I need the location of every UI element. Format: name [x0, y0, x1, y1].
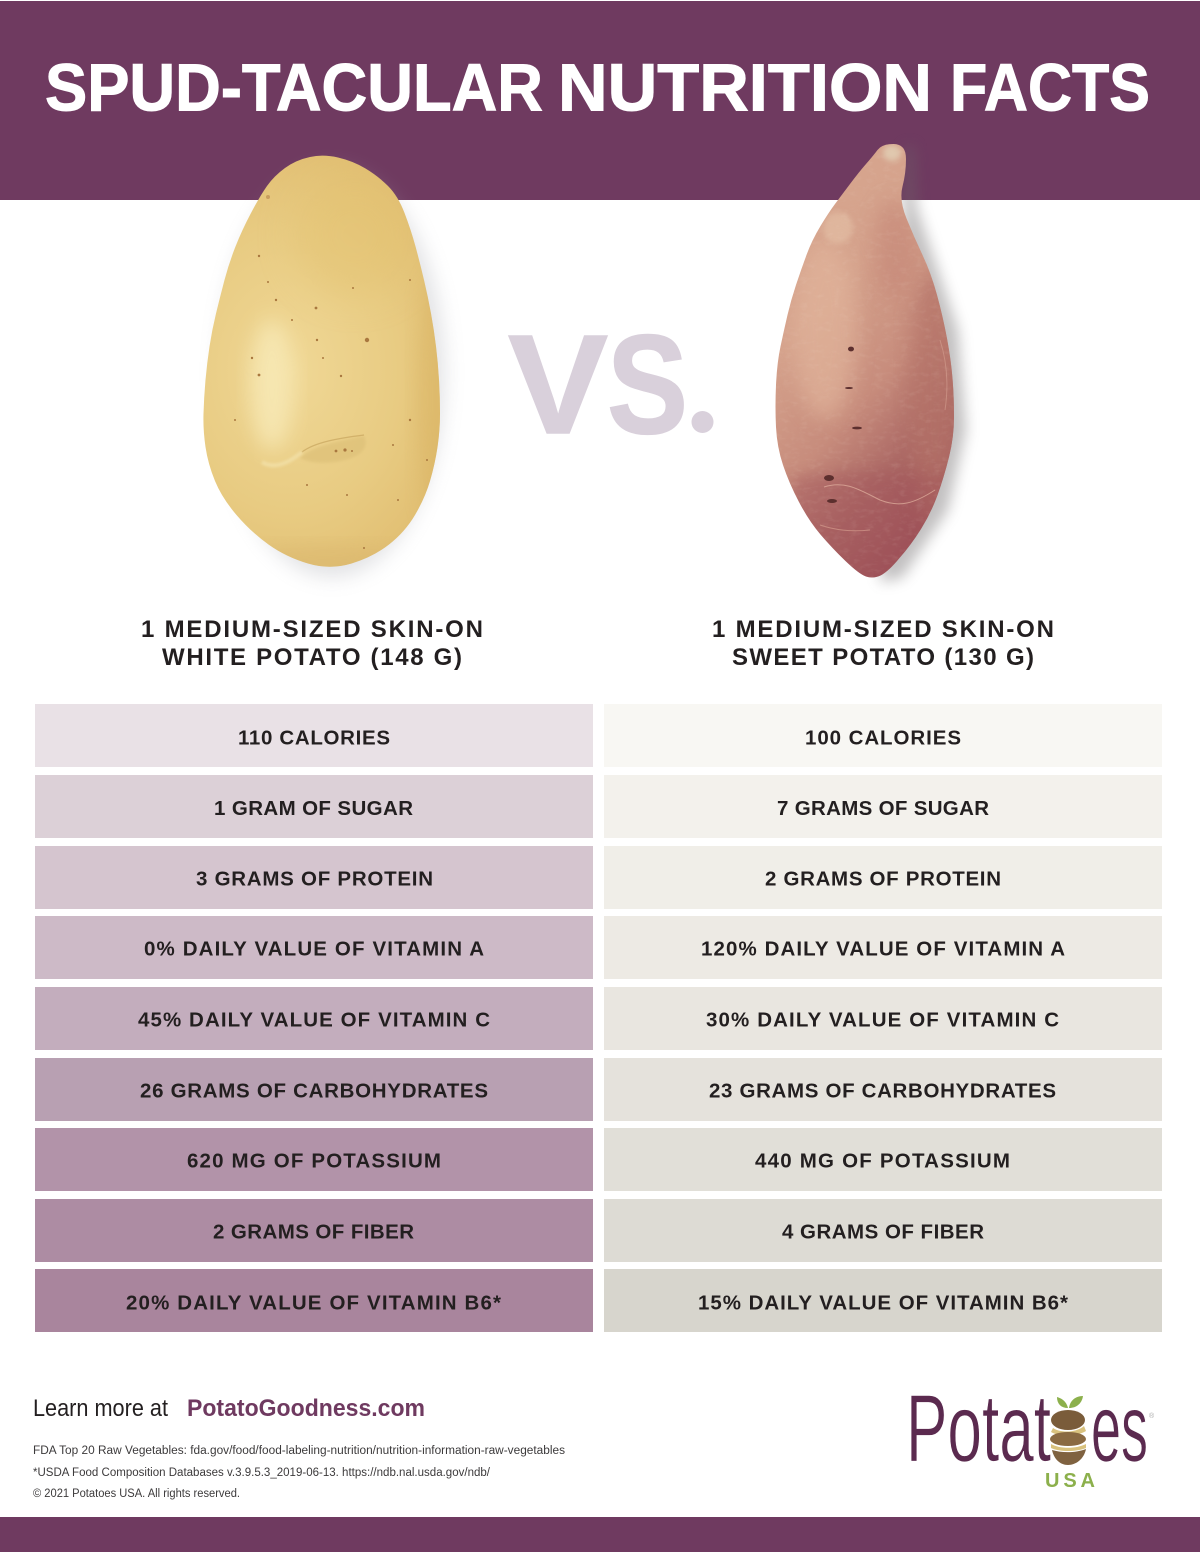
VS label: S	[607, 305, 688, 463]
heading: sweet potato serving	[712, 616, 1054, 671]
row: vitamin C	[35, 987, 593, 1050]
title	[45, 50, 1150, 126]
row: calories	[35, 704, 593, 767]
row: fiber: 2 GRAMS OF FIBER	[213, 1220, 414, 1244]
heading: sweet potato serving: 1 MEDIUM-SIZED SKIN-ON	[712, 616, 1054, 643]
VS label: .	[688, 339, 716, 451]
row: fiber	[604, 1199, 1162, 1262]
row: fiber: 4 GRAMS OF FIBER	[782, 1220, 984, 1244]
row: sugar	[35, 775, 593, 838]
row: protein	[604, 846, 1162, 909]
title: NUTRITION	[558, 50, 932, 126]
call to action: learn more	[33, 1395, 425, 1422]
heading: white potato serving: 1 MEDIUM-SIZED SKIN-ON	[141, 616, 483, 643]
row: vitamin B6: 20% DAILY VALUE OF VITAMIN B6*	[126, 1292, 501, 1314]
row: carbohydrates: 26 GRAMS OF CARBOHYDRATES	[140, 1080, 488, 1102]
footer band	[0, 1517, 1200, 1552]
row: calories	[604, 704, 1162, 767]
footnotes	[33, 1445, 565, 1500]
logo: Potatoes USA: USA	[1045, 1470, 1095, 1492]
VS label	[508, 305, 716, 463]
footnotes: *USDA Food Composition Databases v.3.9.5.3_2019-06-13. https://ndb.nal.usda.gov/ndb/	[33, 1467, 491, 1479]
title: FACTS	[950, 50, 1150, 126]
row: carbohydrates: 23 GRAMS OF CARBOHYDRATES	[709, 1080, 1056, 1102]
panel: sweet potato nutrition column	[604, 704, 1162, 1332]
row: vitamin C	[604, 987, 1162, 1050]
logo: Potatoes USA: ®	[1149, 1412, 1155, 1420]
row: calories: 110 CALORIES	[238, 726, 390, 750]
row: protein: 2 GRAMS OF PROTEIN	[765, 868, 1001, 890]
panel: white potato nutrition column	[35, 704, 593, 1332]
row: calories: 100 CALORIES	[805, 726, 961, 750]
row: vitamin A: 0% DAILY VALUE OF VITAMIN A	[144, 938, 484, 960]
row: potassium	[604, 1128, 1162, 1191]
row: protein: 3 GRAMS OF PROTEIN	[196, 868, 433, 890]
call to action: learn more: PotatoGoodness.com	[187, 1395, 425, 1422]
row: vitamin A: 120% DAILY VALUE OF VITAMIN A	[701, 938, 1065, 960]
row: sugar: 7 GRAMS OF SUGAR	[777, 797, 989, 820]
row: vitamin A	[604, 916, 1162, 979]
heading: white potato serving: WHITE POTATO (148 G)	[162, 644, 462, 671]
footnotes: © 2021 Potatoes USA. All rights reserved.	[33, 1488, 240, 1500]
row: sugar: 1 GRAM OF SUGAR	[214, 797, 413, 820]
row: vitamin B6	[604, 1269, 1162, 1332]
row: protein	[35, 846, 593, 909]
row: vitamin A	[35, 916, 593, 979]
logo: Potatoes USA: Potat	[906, 1375, 1051, 1482]
icon: sliced potato with leaves	[1050, 1396, 1086, 1465]
logo: Potatoes USA: es	[1091, 1375, 1148, 1482]
row: carbohydrates	[604, 1058, 1162, 1121]
icon: sweet potato	[770, 140, 966, 590]
heading: white potato serving	[141, 616, 483, 671]
row: carbohydrates	[35, 1058, 593, 1121]
title: SPUD-TACULAR	[45, 50, 543, 126]
row: sugar	[604, 775, 1162, 838]
row: fiber	[35, 1199, 593, 1262]
header band	[0, 1, 1200, 200]
row: potassium: 440 MG OF POTASSIUM	[755, 1150, 1010, 1172]
icon: white potato	[203, 156, 462, 583]
row: vitamin B6	[35, 1269, 593, 1332]
row: potassium	[35, 1128, 593, 1191]
row: vitamin C: 45% DAILY VALUE OF VITAMIN C	[138, 1008, 490, 1032]
call to action: learn more: Learn more at	[33, 1395, 168, 1422]
VS label: V	[508, 305, 608, 463]
row: potassium: 620 MG OF POTASSIUM	[187, 1150, 441, 1172]
heading: sweet potato serving: SWEET POTATO (130 G)	[732, 644, 1034, 671]
footnotes: FDA Top 20 Raw Vegetables: fda.gov/food/food-labeling-nutrition/nutrition-information-raw-vegetables	[33, 1445, 565, 1457]
row: vitamin C: 30% DAILY VALUE OF VITAMIN C	[706, 1008, 1059, 1032]
row: vitamin B6: 15% DAILY VALUE OF VITAMIN B6*	[698, 1292, 1068, 1314]
